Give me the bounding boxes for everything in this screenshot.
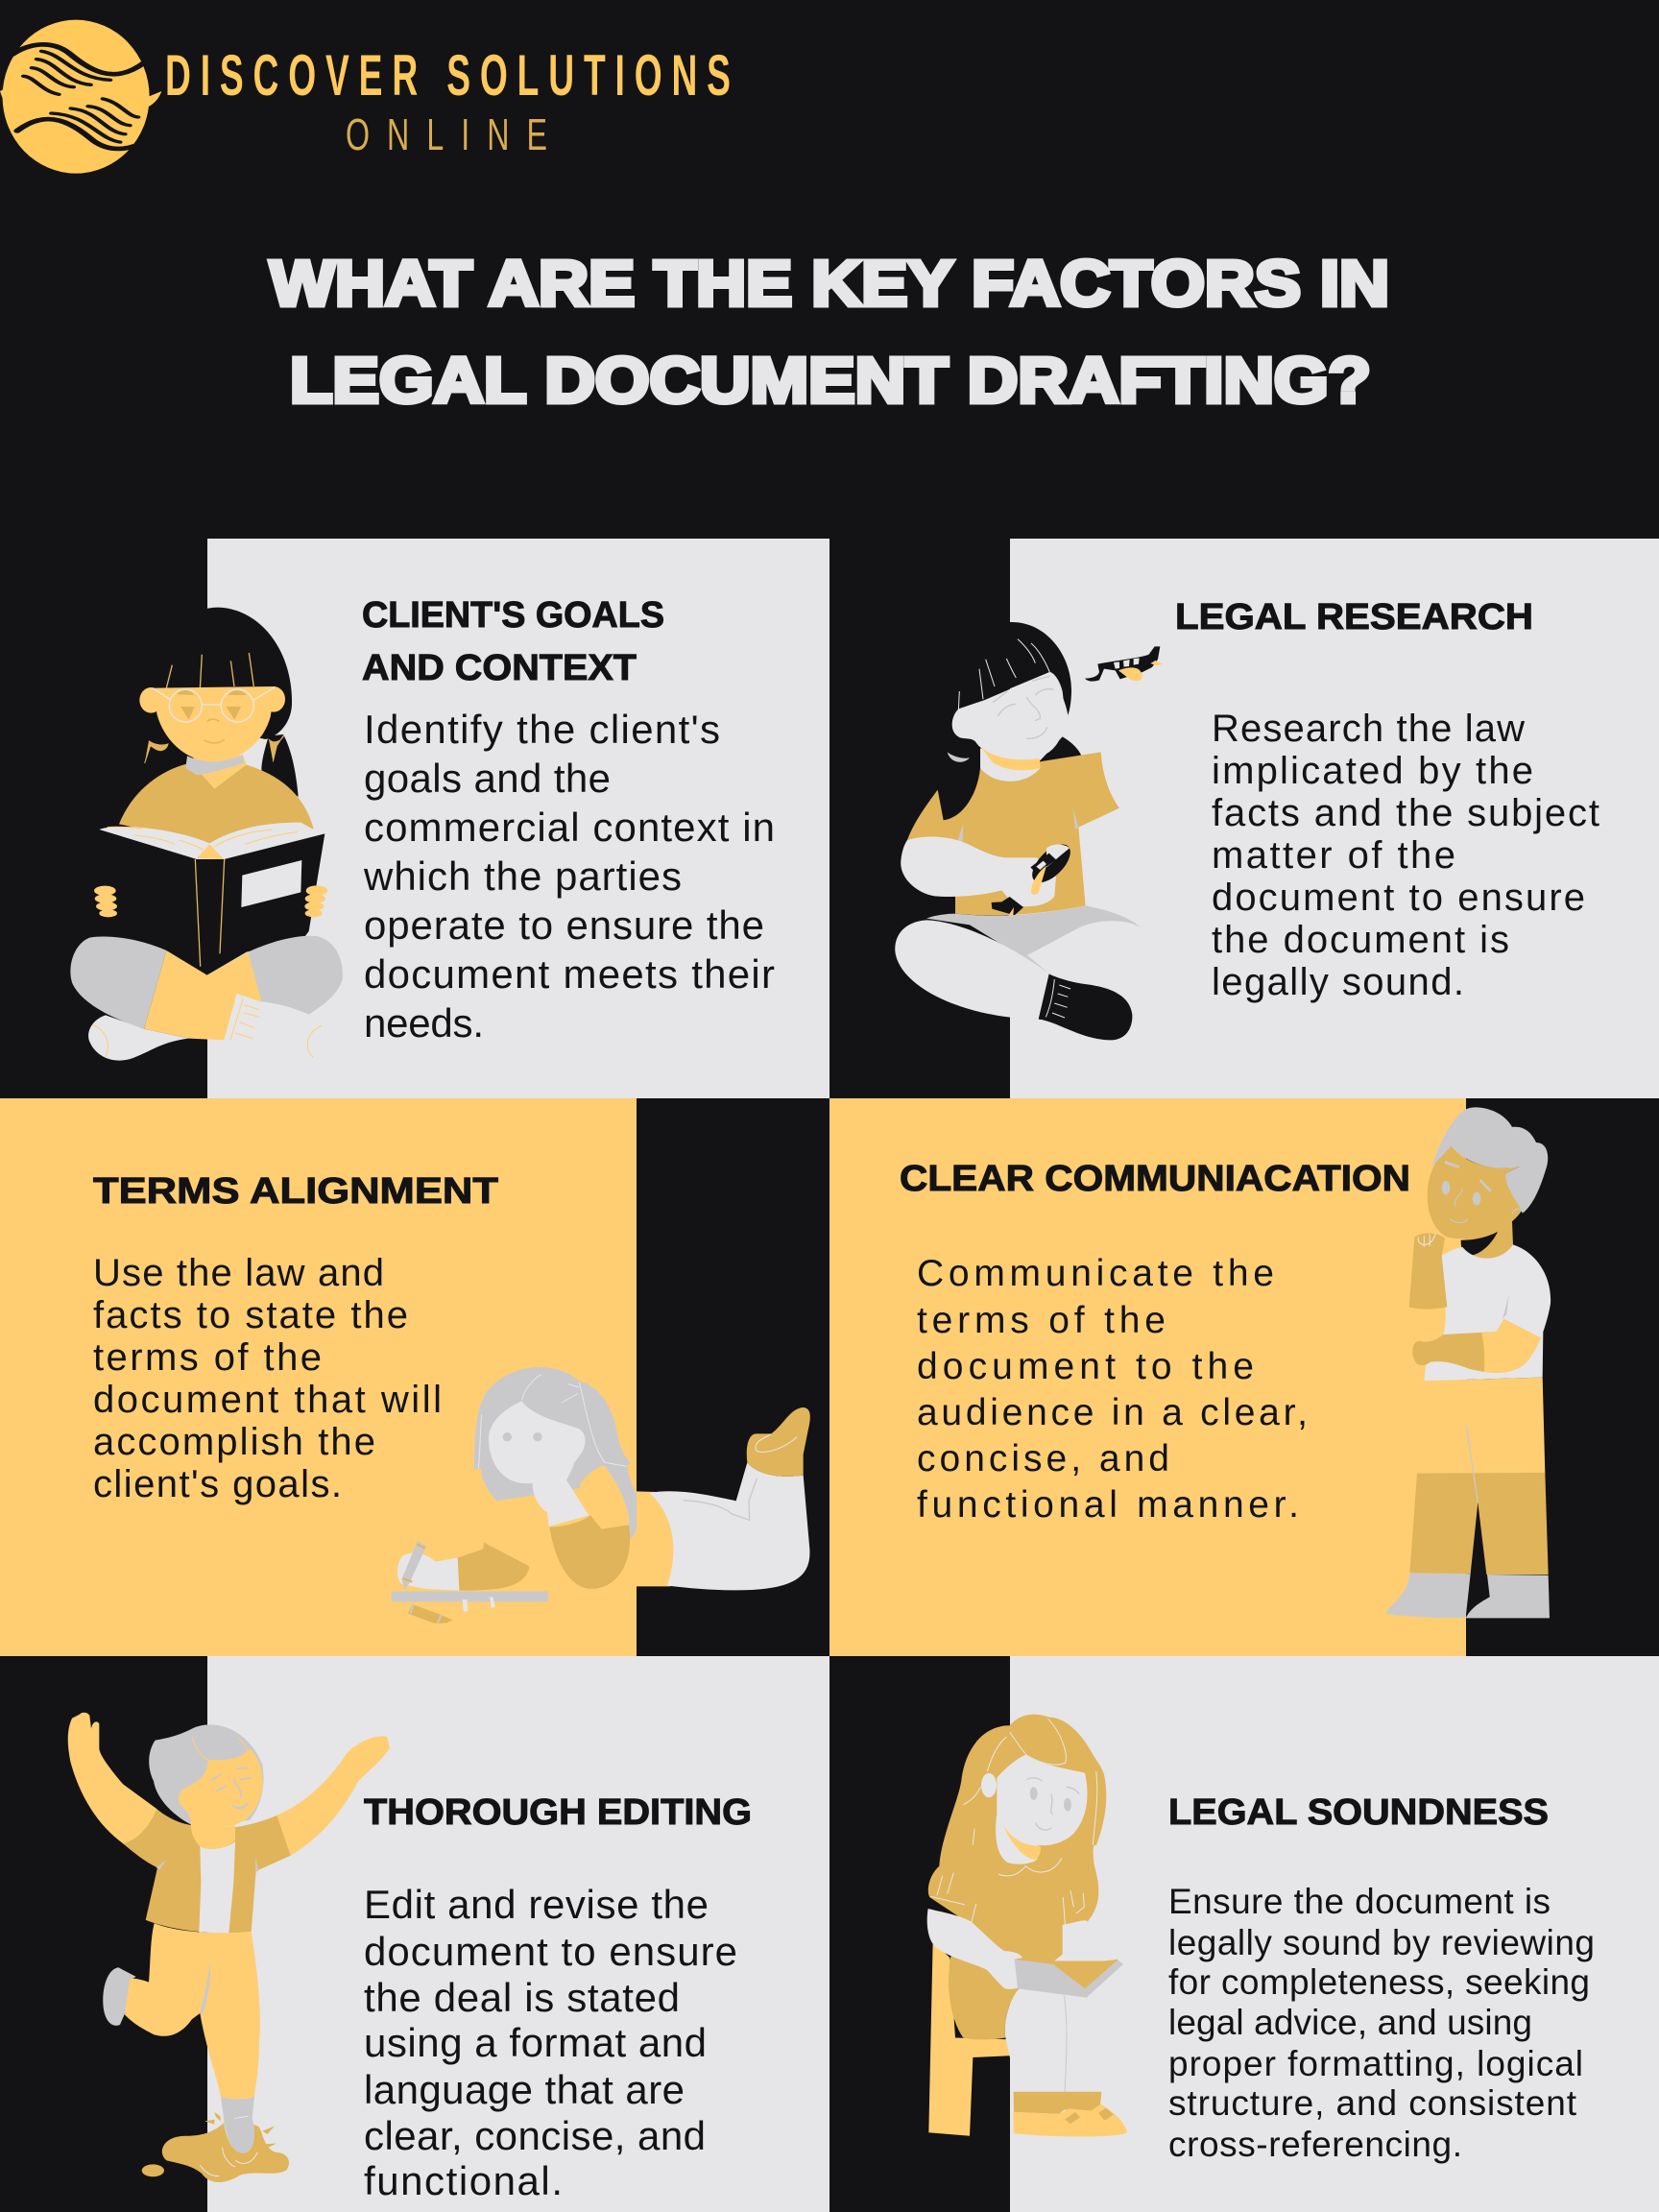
body text: document to ensure	[1212, 877, 1585, 919]
illustration: boy jumping in a puddle	[68, 1713, 390, 2182]
body text: document to the	[917, 1346, 1254, 1387]
body text: needs.	[364, 1000, 484, 1046]
body text: legally sound.	[1212, 961, 1464, 1003]
heading: CLEAR COMMUNIACATION	[900, 1159, 1410, 1199]
body text: matter of the	[1212, 834, 1455, 877]
illustration: girl playing with toy plane	[895, 622, 1163, 1040]
logo mark	[0, 20, 161, 174]
illustration: standing boy thinking	[1385, 1107, 1551, 1618]
body text: goals and the	[364, 756, 611, 801]
body text: using a format and	[364, 2020, 707, 2065]
heading: THOROUGH EDITING	[364, 1792, 752, 1833]
panel: legal soundness	[927, 1656, 1659, 2212]
body text: document to ensure	[364, 1929, 737, 1974]
body text: language that are	[364, 2067, 685, 2112]
title: LEGAL DOCUMENT DRAFTING?	[290, 345, 1371, 417]
body text: clear, concise, and	[364, 2113, 706, 2158]
heading: LEGAL SOUNDNESS	[1168, 1792, 1549, 1833]
panel: legal research	[895, 539, 1659, 1098]
body text: structure, and consistent	[1168, 2083, 1577, 2123]
body text: legally sound by reviewing	[1168, 1923, 1595, 1962]
body text: functional.	[364, 2158, 563, 2203]
body text: Identify the client's	[364, 707, 720, 752]
heading: TERMS ALIGNMENT	[93, 1171, 498, 1212]
heading	[362, 595, 664, 688]
body text: the document is	[1212, 919, 1509, 961]
body text	[93, 1252, 442, 1505]
illustration: girl reading a book	[70, 608, 343, 1061]
body text	[363, 707, 775, 1046]
body text	[1212, 708, 1599, 1003]
panel: client's goals and context	[70, 539, 830, 1098]
body text: which the parties	[363, 854, 682, 899]
body text: implicated by the	[1212, 750, 1533, 792]
body text: client's goals.	[93, 1463, 342, 1505]
body text: concise, and	[917, 1438, 1169, 1479]
panel: clear communication	[830, 1098, 1551, 1656]
body text: the deal is stated	[364, 1975, 680, 2020]
logo	[0, 20, 731, 174]
body text: facts to state the	[93, 1294, 408, 1336]
body text: proper formatting, logical	[1168, 2044, 1583, 2083]
body text: Research the law	[1212, 708, 1525, 750]
panel: terms alignment	[0, 1098, 810, 1656]
body text: legal advice, and using	[1168, 2003, 1532, 2042]
body text: document meets their	[364, 951, 775, 997]
body text: terms of the	[93, 1336, 322, 1379]
body text: Use the law and	[93, 1252, 384, 1294]
body text: operate to ensure the	[364, 902, 764, 948]
body text: accomplish the	[93, 1421, 375, 1463]
body text: functional manner.	[917, 1484, 1299, 1526]
body text	[364, 1882, 737, 2203]
heading: CLIENT'S GOALS	[362, 595, 664, 636]
title: WHAT ARE THE KEY FACTORS IN	[270, 248, 1389, 320]
heading: AND CONTEXT	[362, 648, 637, 688]
title	[270, 248, 1389, 417]
body text: terms of the	[917, 1300, 1166, 1341]
body text: commercial context in	[364, 805, 775, 850]
body text: Ensure the document is	[1168, 1882, 1551, 1921]
illustration: girl sitting on a chair reading	[927, 1715, 1127, 2137]
body text: cross-referencing.	[1168, 2125, 1462, 2164]
heading: LEGAL RESEARCH	[1175, 597, 1533, 637]
logo name: DISCOVER SOLUTIONS	[165, 43, 731, 108]
body text: Communicate the	[917, 1253, 1274, 1294]
logo subtitle: ONLINE	[346, 110, 547, 159]
body text: Edit and revise the	[364, 1882, 709, 1927]
body text	[1168, 1882, 1595, 2164]
body text: facts and the subject	[1212, 792, 1599, 834]
body text: audience in a clear,	[917, 1392, 1308, 1433]
body text	[917, 1253, 1308, 1526]
illustration: girl lying down and writing	[392, 1367, 810, 1623]
body text: document that will	[93, 1379, 442, 1421]
body text: for completeness, seeking	[1168, 1962, 1590, 2002]
panel: thorough editing	[68, 1656, 830, 2212]
